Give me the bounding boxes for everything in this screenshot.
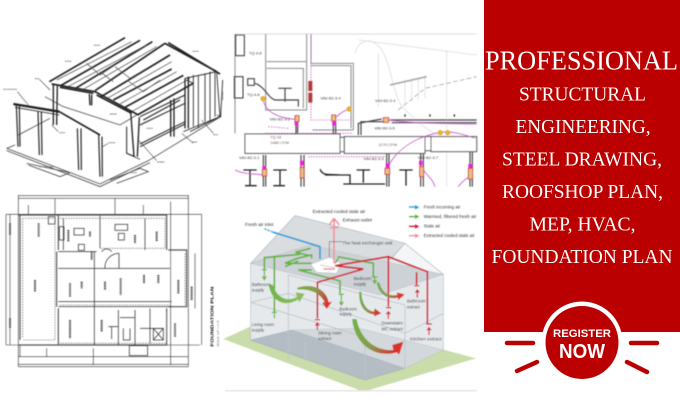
foundation plan title: FOUNDATION PLAN — [209, 286, 215, 347]
fixtures — [48, 217, 163, 356]
diagram labels: Fresh air inlet — [245, 222, 274, 227]
diagram labels: Living room — [252, 322, 274, 327]
bottom rule — [225, 389, 477, 393]
red duct stops and up arrows — [315, 286, 432, 335]
legend: Stale air — [424, 224, 441, 229]
middle floor lines — [251, 275, 443, 380]
wall bracing and girts — [127, 95, 185, 157]
equipment left — [234, 35, 254, 98]
diagram labels: supply — [339, 312, 353, 317]
diagram labels: Kitchen extract — [410, 337, 443, 342]
branch ducts — [255, 83, 477, 187]
duct tags: VAV-B2-3-3 — [363, 156, 385, 161]
duct tags: 1270 CFM — [378, 142, 397, 147]
panel: foundation floor plan — [6, 195, 220, 367]
panel: MEP duct plan — [234, 34, 477, 187]
duct tags: TQ-18 — [270, 134, 282, 139]
ground floor plate — [251, 330, 405, 380]
side wall cladding — [183, 72, 223, 132]
diagram labels: supply — [252, 328, 265, 333]
service list: FOUNDATION PLAN — [492, 246, 672, 268]
curved airflow arrows — [269, 282, 405, 354]
magenta valves — [262, 121, 472, 171]
roof purlins — [49, 38, 193, 115]
legend — [409, 205, 477, 238]
duct tags: VAV-B2-3-5 — [374, 125, 396, 130]
diffusers row — [243, 114, 454, 186]
service list: MEP, HVAC, — [530, 214, 636, 236]
service list: ROOFSHOP PLAN, — [502, 181, 663, 203]
main ducts — [245, 134, 477, 153]
service list: ENGINEERING, — [516, 116, 650, 138]
diagram labels: Bedroom — [354, 276, 372, 281]
callout leader — [329, 242, 342, 257]
red risers — [308, 81, 312, 103]
foundation plan title — [209, 286, 220, 347]
green supply ducts — [264, 248, 373, 312]
diagram labels: extract — [407, 304, 421, 309]
diagram labels — [245, 209, 443, 342]
service list — [492, 84, 672, 268]
register now badge: REGISTER — [553, 328, 611, 340]
leader labels — [3, 45, 223, 173]
diagram labels: Bathroom — [252, 282, 271, 287]
duct tags: VAV-B2-3-4 — [320, 95, 342, 100]
panel: red service banner — [484, 0, 680, 332]
legend: Fresh incoming air — [424, 205, 461, 210]
diagram labels: supply — [354, 282, 367, 287]
orange terminal boxes — [262, 115, 473, 179]
legend: Extracted cooled stale air — [424, 233, 475, 238]
porch frame — [13, 104, 102, 177]
roof and gable — [251, 216, 443, 274]
duct tags: VAV-B2-3-7 — [418, 155, 439, 160]
foundation plan title: SCALE: 1/4" = 1'-0" — [216, 320, 220, 347]
duct tags: 1480 CFM — [270, 140, 289, 145]
red stale air ducts — [317, 257, 427, 323]
diagram labels: WC extract — [381, 326, 404, 331]
pink exhaust duct — [323, 218, 339, 269]
outer walls dashed — [18, 215, 187, 345]
diagram labels: Bedroom — [339, 306, 357, 311]
plan border and walls — [235, 34, 477, 133]
duct tags — [239, 51, 439, 161]
heat exchanger unit — [311, 257, 341, 273]
diagram labels: The heat exchanger unit — [342, 240, 393, 245]
duct tags: VAV-B2-3-1 — [239, 155, 260, 160]
diagram labels: Bathroom — [407, 298, 426, 303]
base slab outline — [7, 97, 221, 187]
gable rafters — [52, 43, 220, 115]
diagram labels: Extracted cooled stale air — [313, 209, 366, 214]
faint background stair geometry — [355, 40, 477, 187]
duct tags: VAV-B2-3-2 — [270, 117, 291, 122]
panel: HVAC heat recovery house diagram — [223, 205, 477, 392]
green down arrows — [262, 270, 377, 318]
upper ceiling plate — [251, 245, 443, 295]
duct tags: TQ-4-8 — [249, 51, 262, 56]
blue fresh air duct — [264, 229, 320, 259]
yellow sensors — [261, 96, 450, 135]
interior partitions — [58, 216, 172, 345]
badge rays — [507, 343, 657, 372]
frame columns — [53, 77, 188, 157]
house walls — [251, 216, 443, 380]
service list: STRUCTURAL — [519, 84, 646, 106]
dimension lines — [6, 195, 202, 367]
diagram labels: extract — [318, 336, 332, 341]
duct tags: VAV-B2-3-4 — [375, 98, 396, 103]
diagram labels: Dining room — [318, 330, 342, 335]
panel: steel frame isometric drawing — [3, 38, 223, 187]
lawn — [223, 308, 476, 392]
service list: STEEL DRAWING, — [502, 148, 662, 170]
duct tags: TQ-4-8 — [247, 92, 260, 97]
room labels — [10, 223, 192, 338]
register now badge — [542, 302, 622, 382]
magenta control lines — [235, 34, 477, 187]
diagram labels: Downstairs — [381, 321, 403, 326]
heading: professional: PROFESSIONAL — [485, 46, 678, 76]
legend: Warmed, filtered fresh air — [424, 214, 477, 219]
register now badge: NOW — [559, 341, 605, 363]
diagram labels: supply — [252, 288, 265, 293]
diagram labels: Exhaust outlet — [343, 218, 373, 223]
